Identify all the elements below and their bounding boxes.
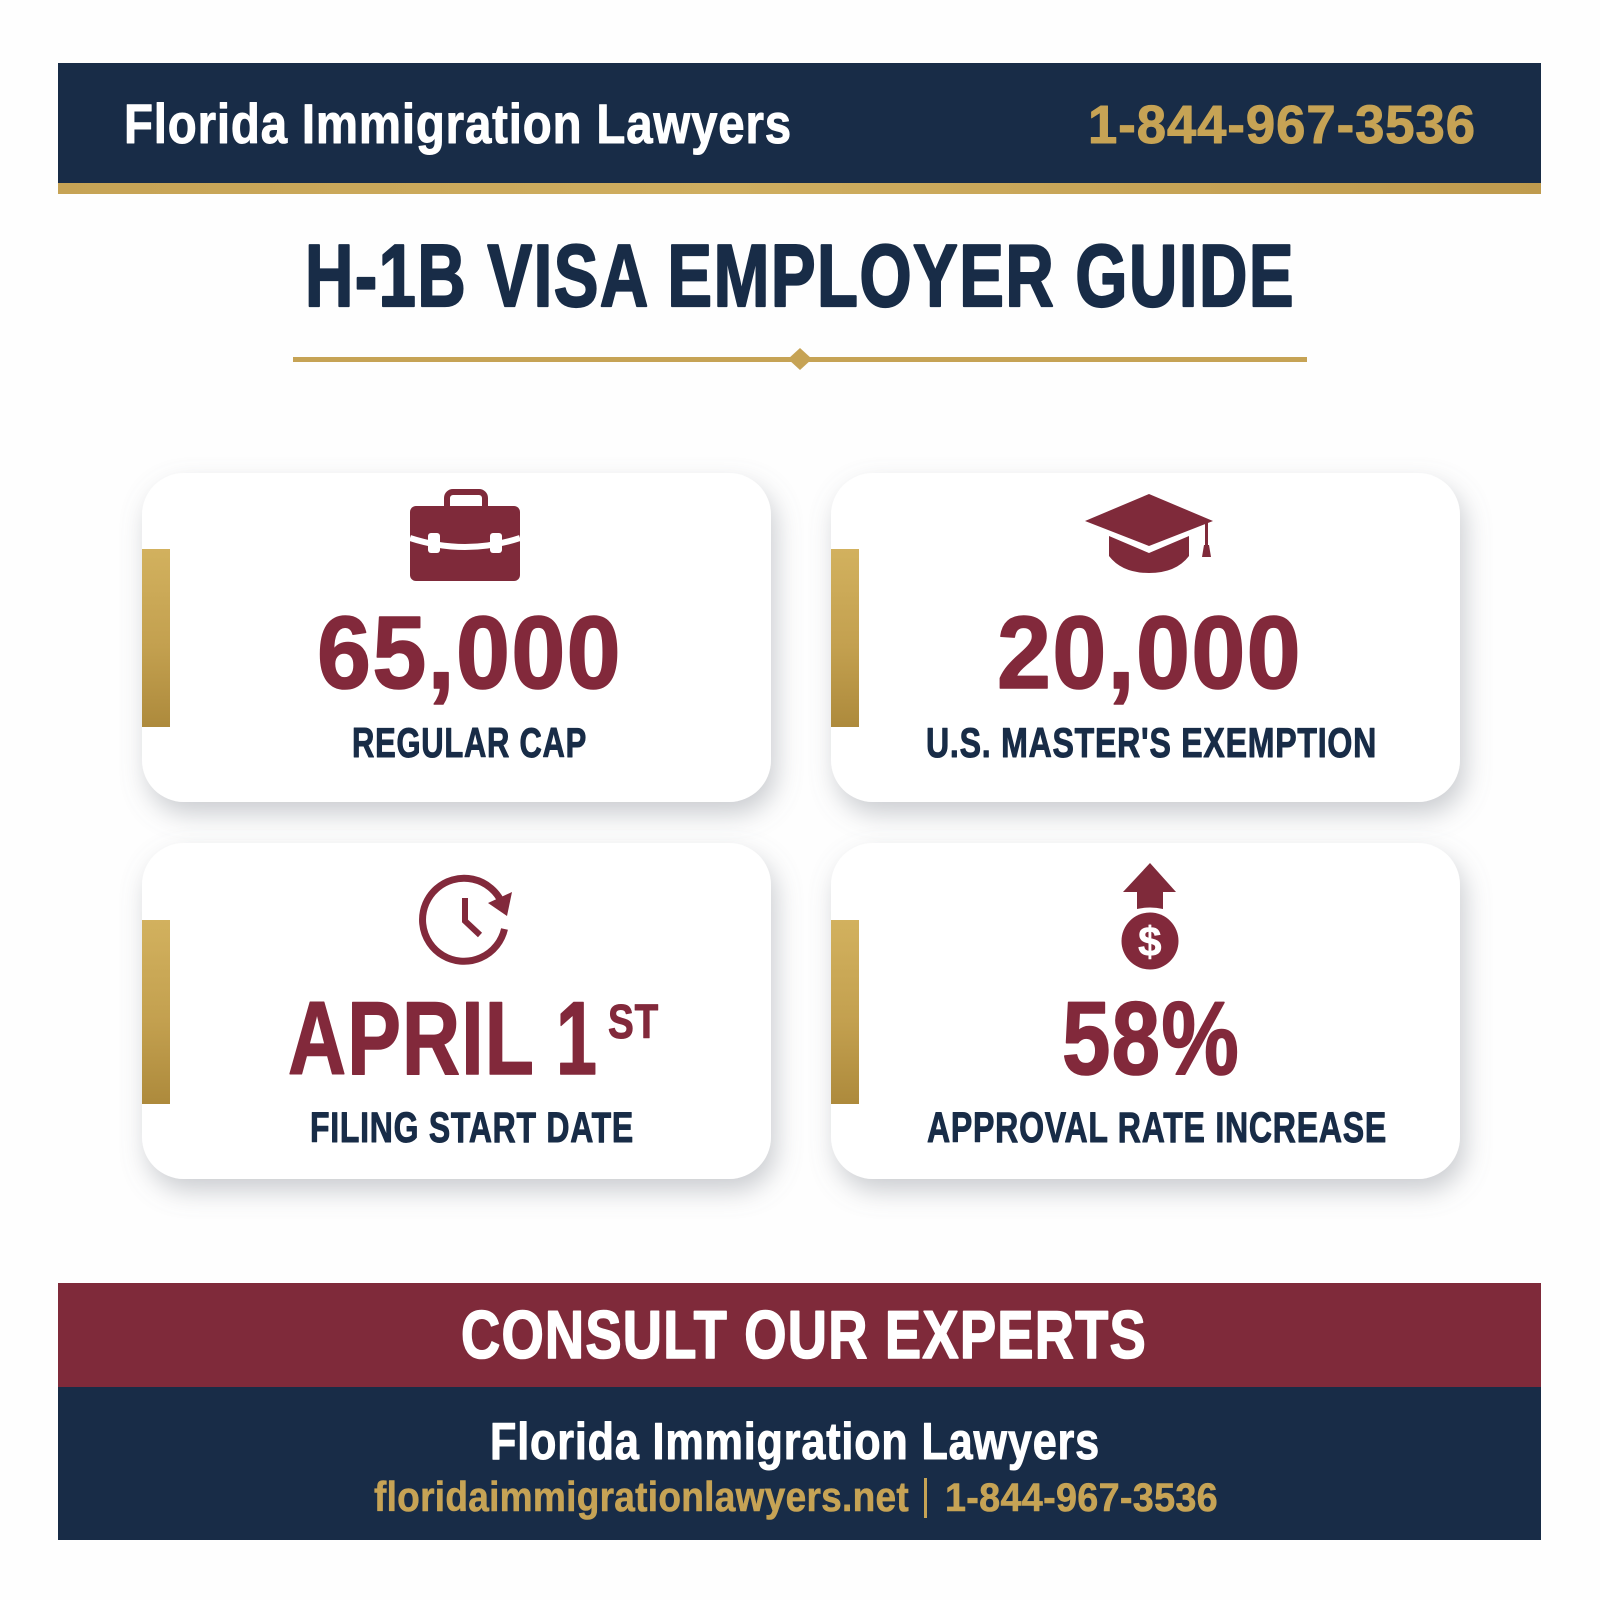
stat value: 58%: 58%: [1062, 981, 1240, 1097]
stat value: April 1st: 1: [556, 981, 598, 1097]
icon: graduation cap: [1085, 494, 1213, 573]
panel: regular cap: [142, 473, 771, 802]
footer phone number: 1-844-967-3536: [945, 1476, 1218, 1520]
call to action heading: CONSULT OUR EXPERTS: [461, 1297, 1147, 1373]
footer website: floridaimmigrationlawyers.net: [374, 1473, 909, 1520]
header bar: [58, 63, 1541, 194]
stat label: master's exemption: U.S. MASTER'S EXEMPTION: [926, 719, 1377, 766]
footer separator: [924, 1478, 927, 1518]
stat value: April 1st: APRIL: [288, 981, 535, 1097]
call to action banner: [58, 1283, 1541, 1387]
panel: approval rate increase: [831, 843, 1460, 1179]
title: H-1B VISA EMPLOYER GUIDE: [305, 226, 1295, 325]
stat label: approval rate increase: APPROVAL RATE INCREASE: [927, 1104, 1387, 1152]
stat value: April 1st: ST: [608, 996, 659, 1049]
icon: briefcase: [410, 492, 520, 581]
panel: master's exemption: [831, 473, 1460, 802]
stat value: 65,000: 65,000: [317, 595, 622, 710]
stat value: 20,000: 20,000: [997, 595, 1302, 710]
footer firm name: Florida Immigration Lawyers: [490, 1413, 1100, 1471]
title divider with diamond: [293, 348, 1307, 370]
panel: filing start date: [142, 843, 771, 1179]
icon: dollar with up arrow: [1122, 863, 1178, 970]
stat label: filing start date: FILING START DATE: [310, 1104, 634, 1152]
icon: dollar with up arrow: $: [1138, 918, 1162, 965]
icon: clock with arrow: [423, 878, 512, 961]
header phone number: 1-844-967-3536: [1088, 95, 1476, 155]
stat label: regular cap: REGULAR CAP: [352, 719, 587, 766]
footer contact panel: [58, 1387, 1541, 1540]
header firm name: Florida Immigration Lawyers: [124, 92, 792, 155]
